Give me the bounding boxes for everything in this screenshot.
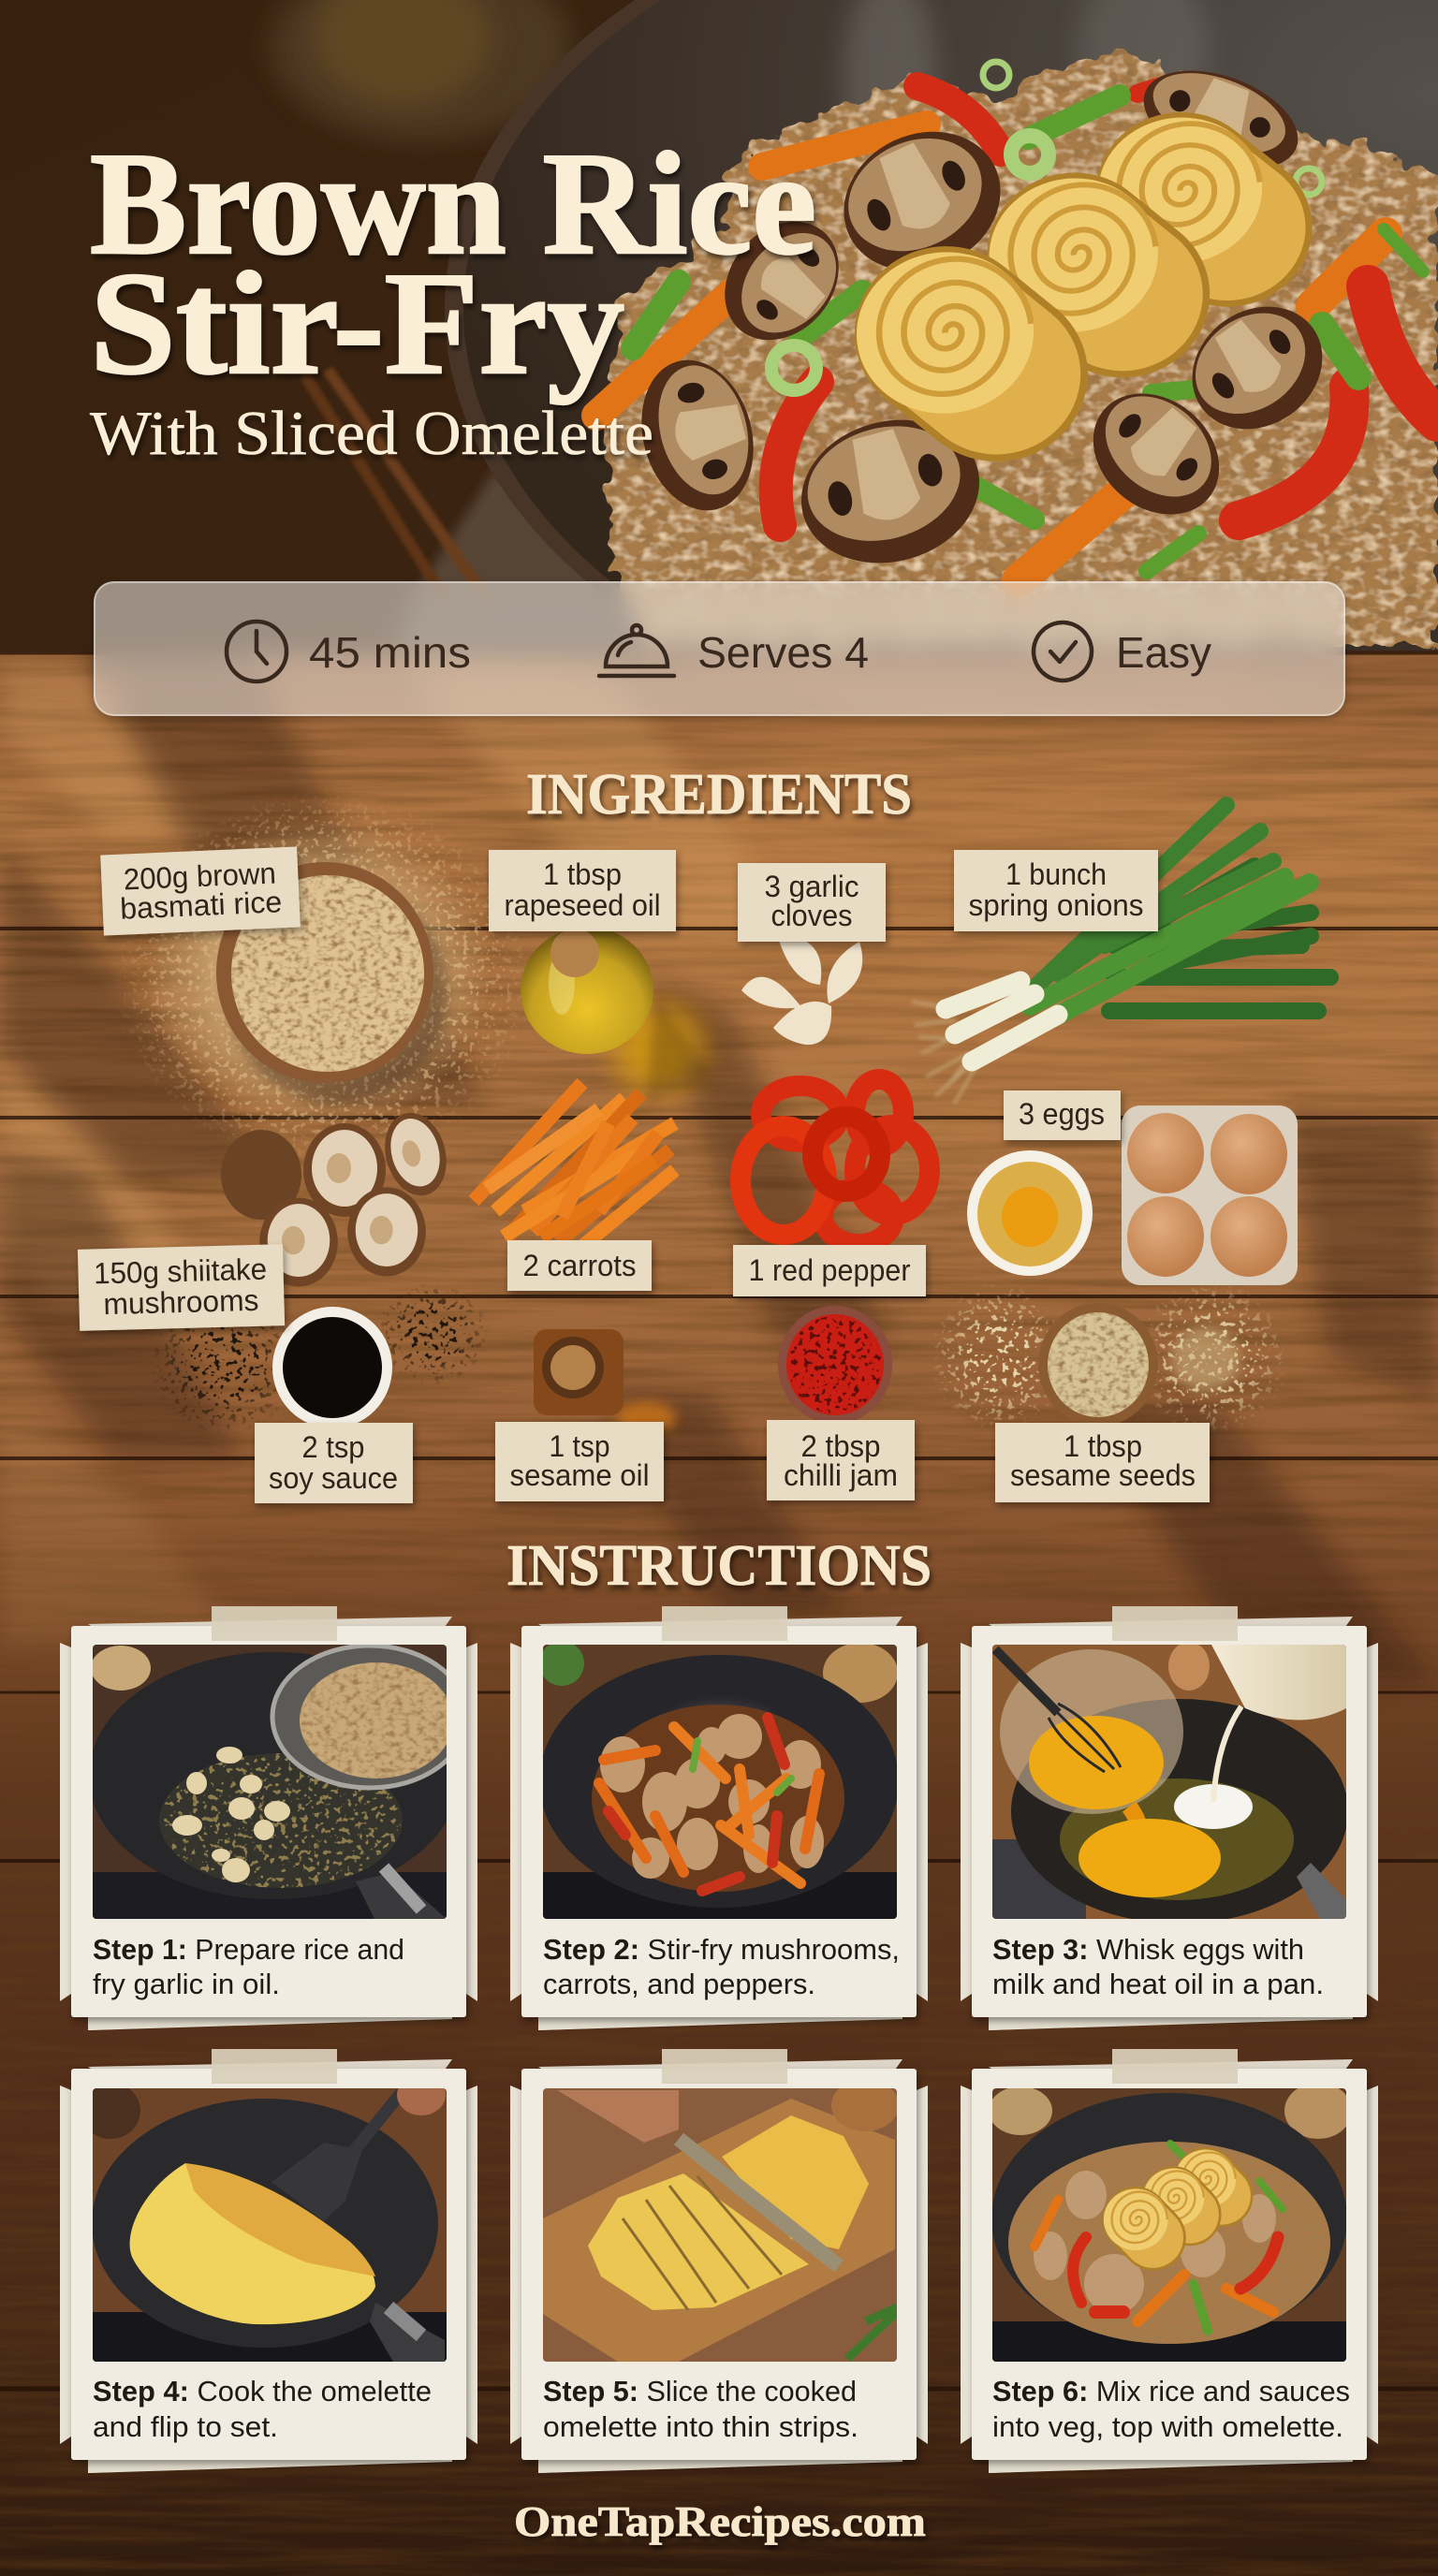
footer: website: OneTapRecipes.com	[514, 2497, 926, 2545]
label: eggs	[1004, 1090, 1121, 1140]
label: red pepper	[733, 1245, 926, 1296]
label: sesame oil	[495, 1422, 664, 1501]
step card 2: carrots, and peppers.	[543, 1968, 815, 2000]
label: carrots	[507, 1240, 652, 1291]
label: soy sauce: 2 tsp	[301, 1430, 365, 1464]
label: garlic: 3 garlic	[764, 870, 859, 903]
photo: frying garlic with rice sieve	[89, 1645, 467, 1919]
label: brown basmati rice	[100, 846, 301, 936]
label: sesame seeds	[995, 1423, 1210, 1502]
label: brown basmati rice: 200g brown	[123, 856, 277, 897]
hero vegetables	[596, 62, 1438, 580]
icon: difficulty badge	[1034, 622, 1092, 681]
photo: slicing the omelette on a board	[543, 2079, 899, 2362]
ingredient: spring onions	[913, 805, 1330, 1103]
ingredient: red pepper rings	[741, 1079, 930, 1244]
ingredient: shiitake mushrooms	[221, 1105, 455, 1286]
photo: flipping the omelette	[81, 2074, 447, 2362]
heading: instructions: INSTRUCTIONS	[506, 1534, 932, 1598]
step card 2	[510, 1606, 928, 2030]
photo: whisking eggs and pouring milk	[992, 1642, 1348, 1924]
caption: Step 4: Cook the omelette	[93, 2375, 432, 2408]
caption: Step 1: Prepare rice and	[93, 1933, 404, 1966]
label: rapeseed oil: 1 tbsp	[543, 857, 622, 891]
wood table background	[0, 646, 1438, 2576]
label: spring onions	[954, 850, 1158, 931]
label: soy sauce	[255, 1423, 413, 1503]
ingredient: rapeseed oil bottle	[521, 927, 712, 1105]
ingredient: brown basmati rice bowl	[114, 791, 536, 1165]
label: sesame oil: sesame oil	[509, 1458, 650, 1492]
ingredient: chilli jam jar	[778, 1306, 892, 1424]
caption: Step 2: Stir-fry mushrooms,	[543, 1933, 900, 1966]
title: Brown Rice	[90, 122, 816, 285]
step card 5: omelette into thin strips.	[543, 2410, 858, 2443]
photo: stir-fried vegetables in wok	[539, 1641, 899, 1919]
stat: time: 45 mins	[309, 628, 471, 677]
step card 3: milk and heat oil in a pan.	[992, 1968, 1324, 2000]
panel: time, servings and difficulty	[94, 581, 1345, 716]
ingredient: eggs in carton and cracked egg	[967, 1105, 1298, 1285]
ingredient: soy sauce dish	[150, 1282, 489, 1435]
title	[90, 122, 816, 468]
label: shiitake mushrooms: 150g shiitake	[94, 1252, 267, 1290]
label: red pepper: 1 red pepper	[749, 1253, 911, 1287]
label: spring onions: spring onions	[968, 888, 1144, 922]
label: garlic	[738, 863, 886, 942]
caption: Step 3: Whisk eggs with	[992, 1933, 1304, 1966]
label: chilli jam: 2 tbsp	[801, 1429, 880, 1463]
icon: clock	[227, 622, 286, 681]
step card 5	[510, 2049, 928, 2473]
photo: finished stir-fry in wok	[989, 2083, 1352, 2362]
ingredient: garlic cloves	[741, 934, 862, 1045]
label: garlic: cloves	[771, 899, 852, 932]
step card 1: fry garlic in oil.	[93, 1968, 280, 2000]
label: brown basmati rice: basmati rice	[119, 885, 283, 926]
ingredient: sesame seeds bowl	[930, 1281, 1289, 1434]
step card 4: and flip to set.	[93, 2410, 278, 2443]
label: soy sauce: soy sauce	[269, 1461, 398, 1495]
step card 3	[961, 1606, 1378, 2030]
label: spring onions: 1 bunch	[1005, 857, 1107, 891]
label: shiitake mushrooms	[78, 1244, 285, 1331]
caption: Step 5: Slice the cooked	[543, 2375, 857, 2408]
step card 4	[60, 2049, 477, 2473]
stat: difficulty: Easy	[1116, 628, 1211, 677]
label: shiitake mushrooms: mushrooms	[103, 1283, 259, 1321]
label: sesame seeds: sesame seeds	[1010, 1458, 1196, 1492]
title: With Sliced Omelette	[90, 399, 653, 468]
stat: servings: Serves 4	[697, 628, 869, 677]
step card 6: into veg, top with omelette.	[992, 2410, 1343, 2443]
caption: Step 6: Mix rice and sauces	[992, 2375, 1350, 2408]
step card 1	[60, 1606, 477, 2030]
ingredient: sesame oil bottle	[534, 1329, 676, 1435]
label: rapeseed oil: rapeseed oil	[504, 888, 661, 922]
label: chilli jam	[767, 1420, 915, 1500]
icon: serving cloche	[599, 625, 674, 676]
label: sesame seeds: 1 tbsp	[1064, 1429, 1142, 1463]
ingredient: carrots	[474, 1083, 675, 1252]
step card 6	[961, 2049, 1378, 2473]
hero photo: stir-fry wok	[0, 0, 1438, 663]
label: carrots: 2 carrots	[522, 1249, 637, 1282]
heading: ingredients: INGREDIENTS	[526, 763, 912, 827]
label: sesame oil: 1 tsp	[549, 1429, 610, 1463]
label: rapeseed oil	[489, 850, 676, 931]
label: chilli jam: chilli jam	[784, 1458, 898, 1492]
title: Stir-Fry	[90, 242, 624, 404]
label: eggs: 3 eggs	[1019, 1097, 1105, 1131]
